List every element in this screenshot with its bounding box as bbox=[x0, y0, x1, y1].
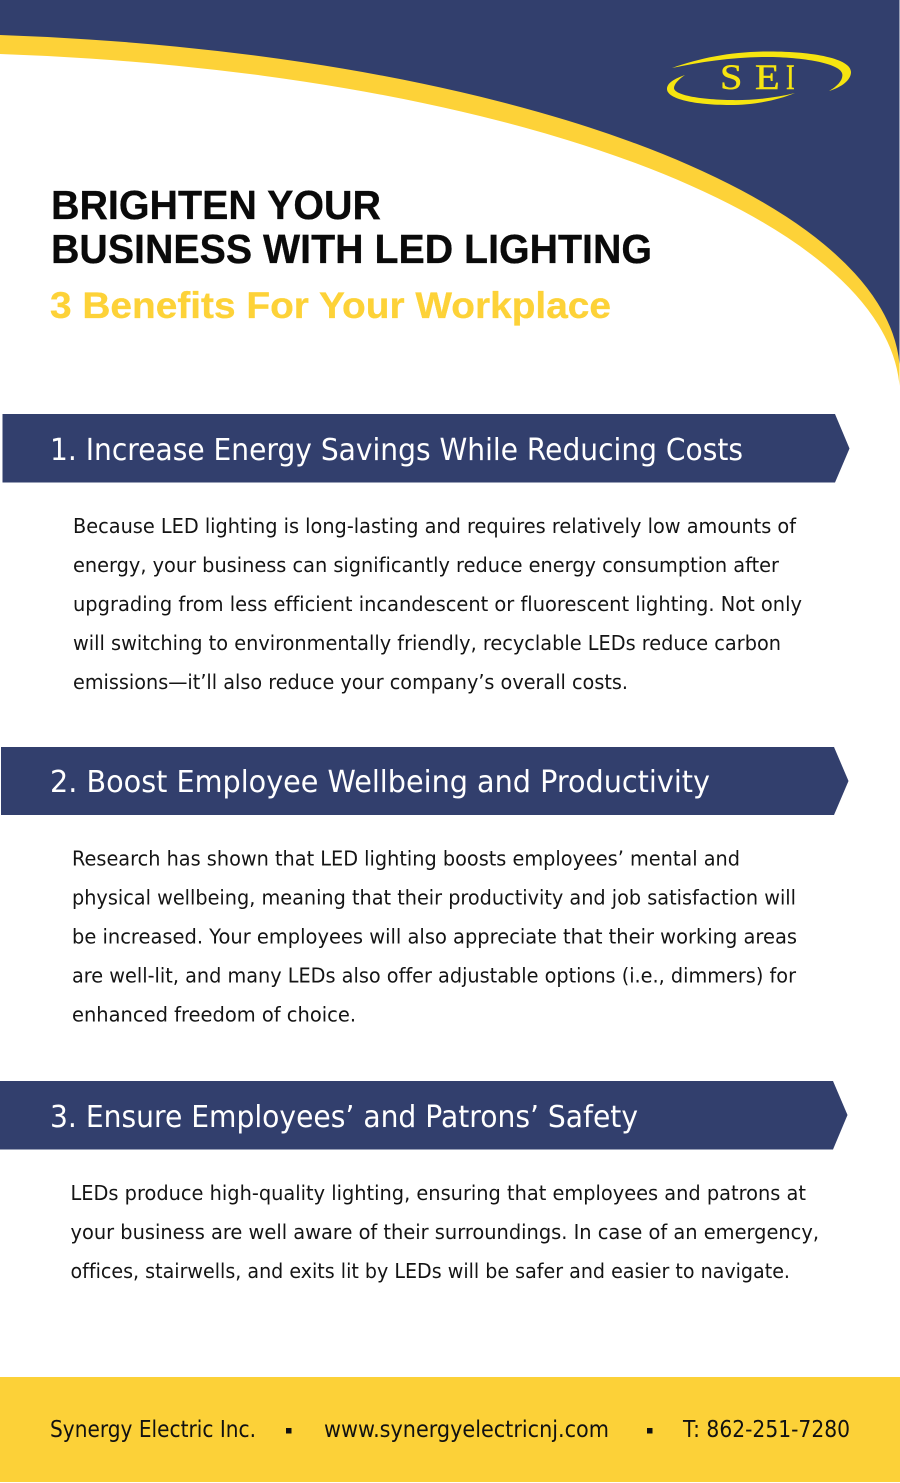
company name: Synergy Electric Inc. bbox=[50, 1417, 256, 1443]
banner shape bbox=[0, 1081, 848, 1150]
section 1 body text: upgrading from less efficient incandescent or fluorescent lighting. Not only bbox=[73, 592, 802, 616]
section 1 banner bbox=[2, 414, 850, 482]
title line 2: BUSINESS WITH LED LIGHTING bbox=[51, 226, 652, 272]
footer bbox=[0, 1377, 900, 1482]
header swoosh bbox=[0, 0, 900, 386]
separator bbox=[286, 1428, 292, 1434]
logo lower swoosh bbox=[667, 75, 795, 105]
banner heading: 2. Boost Employee Wellbeing and Productivity bbox=[50, 765, 710, 800]
section 2 body text: enhanced freedom of choice. bbox=[72, 1002, 356, 1026]
footer bar bbox=[0, 1377, 900, 1482]
banner shape bbox=[1, 747, 848, 815]
navy header shape bbox=[0, 0, 900, 364]
section 2 body text: physical wellbeing, meaning that their productivity and job satisfaction will bbox=[72, 886, 796, 910]
title bbox=[51, 182, 652, 272]
section 1 bbox=[2, 414, 850, 694]
title line 1: BRIGHTEN YOUR bbox=[51, 182, 381, 228]
section 2 body text: be increased. Your employees will also appreciate that their working areas bbox=[72, 924, 797, 948]
logo: SEI bbox=[667, 51, 851, 105]
logo upper swoosh bbox=[672, 51, 851, 91]
banner heading: 1. Increase Energy Savings While Reducing Costs bbox=[50, 433, 743, 468]
section 3 body text: LEDs produce high-quality lighting, ensuring that employees and patrons at bbox=[70, 1181, 806, 1205]
section 3 body text: offices, stairwells, and exits lit by LEDs will be safer and easier to navigate. bbox=[70, 1259, 790, 1283]
phone: T: 862-251-7280 bbox=[682, 1417, 850, 1443]
section 1 body text: Because LED lighting is long-lasting and requires relatively low amounts of bbox=[73, 514, 797, 538]
banner shape bbox=[2, 414, 850, 482]
section 2 body text: Research has shown that LED lighting boosts employees’ mental and bbox=[72, 846, 740, 870]
section 3 body text: your business are well aware of their surroundings. In case of an emergency, bbox=[70, 1220, 819, 1244]
section 2 body text bbox=[72, 846, 797, 1026]
gold curved band bbox=[0, 0, 900, 386]
banner heading: 3. Ensure Employees’ and Patrons’ Safety bbox=[50, 1100, 638, 1135]
website: www.synergyelectricnj.com bbox=[324, 1417, 609, 1443]
section 1 body text: energy, your business can significantly reduce energy consumption after bbox=[73, 553, 780, 577]
section 1 body text: will switching to environmentally friendly, recyclable LEDs reduce carbon bbox=[73, 631, 781, 655]
section 2 banner bbox=[1, 747, 848, 815]
section 3 banner bbox=[0, 1081, 848, 1150]
section 3 body text bbox=[70, 1181, 819, 1283]
separator bbox=[647, 1428, 652, 1434]
section 3 bbox=[0, 1081, 848, 1283]
section 2 body text: are well-lit, and many LEDs also offer adjustable options (i.e., dimmers) for bbox=[72, 964, 797, 988]
section 1 body text: emissions—it’ll also reduce your company’s overall costs. bbox=[73, 670, 628, 694]
section 2 bbox=[1, 747, 848, 1026]
subtitle: 3 Benefits For Your Workplace bbox=[50, 285, 611, 326]
logo letters: I bbox=[786, 57, 795, 97]
logo letters: SE bbox=[720, 58, 780, 97]
section 1 body text bbox=[73, 514, 802, 694]
